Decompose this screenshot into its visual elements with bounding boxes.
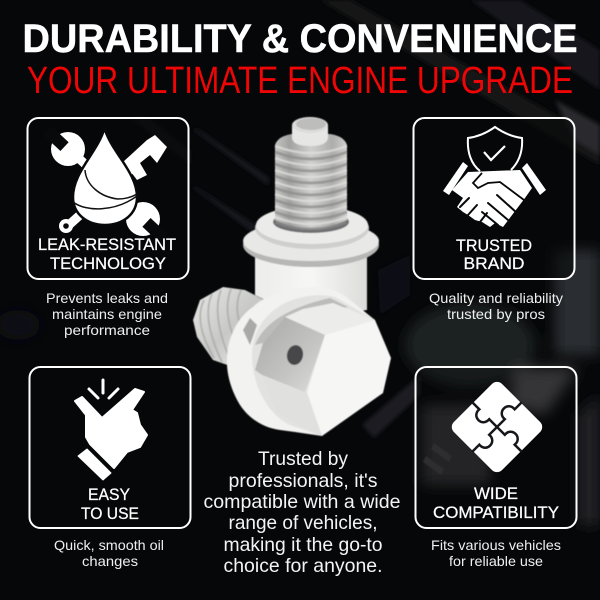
caption: wide compatibility: for reliable use bbox=[449, 553, 543, 569]
label bbox=[456, 236, 532, 273]
panel: trusted brand bbox=[414, 118, 574, 279]
label: LEAK-RESISTANT bbox=[38, 235, 176, 254]
label: COMPATIBILITY bbox=[433, 503, 559, 522]
label: TECHNOLOGY bbox=[50, 254, 166, 273]
center paragraph: choice for anyone. bbox=[224, 555, 382, 577]
icon: oil drop with wrenches bbox=[43, 126, 168, 243]
caption: easy to use: Quick, smooth oil bbox=[54, 537, 164, 553]
label: BRAND bbox=[464, 254, 524, 273]
label: WIDE bbox=[474, 484, 518, 503]
front bolt bbox=[193, 287, 391, 436]
caption: trusted brand: Quality and reliability bbox=[429, 290, 563, 306]
center paragraph: making it the go-to bbox=[224, 534, 383, 556]
icon: shield and handshake bbox=[443, 127, 546, 227]
back bolt bbox=[243, 117, 379, 318]
caption: leak-resistant bbox=[46, 290, 168, 338]
caption: leak-resistant: maintains engine bbox=[52, 306, 162, 322]
panel: easy to use bbox=[30, 367, 190, 528]
center paragraph: range of vehicles, bbox=[228, 512, 378, 534]
label bbox=[433, 484, 559, 522]
panel frame bbox=[28, 118, 188, 279]
panel frame bbox=[30, 367, 190, 528]
caption: leak-resistant: performance bbox=[64, 322, 150, 338]
caption: trusted brand bbox=[429, 290, 563, 322]
center paragraph: professionals, it's bbox=[228, 470, 378, 492]
panel: wide compatibility bbox=[416, 367, 576, 528]
caption: wide compatibility bbox=[431, 537, 561, 569]
center paragraph bbox=[204, 448, 400, 577]
panel frame bbox=[414, 118, 574, 279]
caption: trusted brand: trusted by pros bbox=[447, 306, 545, 322]
panel frame bbox=[416, 367, 576, 528]
label: EASY bbox=[88, 485, 130, 504]
label bbox=[38, 235, 176, 273]
center paragraph: Trusted by bbox=[258, 448, 348, 470]
icon: puzzle pieces bbox=[448, 378, 546, 476]
center paragraph: compatible with a wide bbox=[204, 491, 400, 513]
caption: leak-resistant: Prevents leaks and bbox=[46, 290, 168, 306]
caption: easy to use bbox=[54, 537, 164, 569]
panel: leak-resistant technology bbox=[28, 118, 188, 279]
icon: finger snap bbox=[75, 380, 147, 480]
caption: wide compatibility: Fits various vehicles bbox=[431, 537, 561, 553]
caption: easy to use: changes bbox=[82, 553, 138, 569]
title: DURABILITY & CONVENIENCE bbox=[22, 17, 578, 61]
label: TRUSTED bbox=[456, 236, 532, 255]
product image: two silver drain bolts bbox=[193, 117, 391, 436]
label: TO USE bbox=[81, 504, 139, 523]
label bbox=[81, 485, 139, 523]
